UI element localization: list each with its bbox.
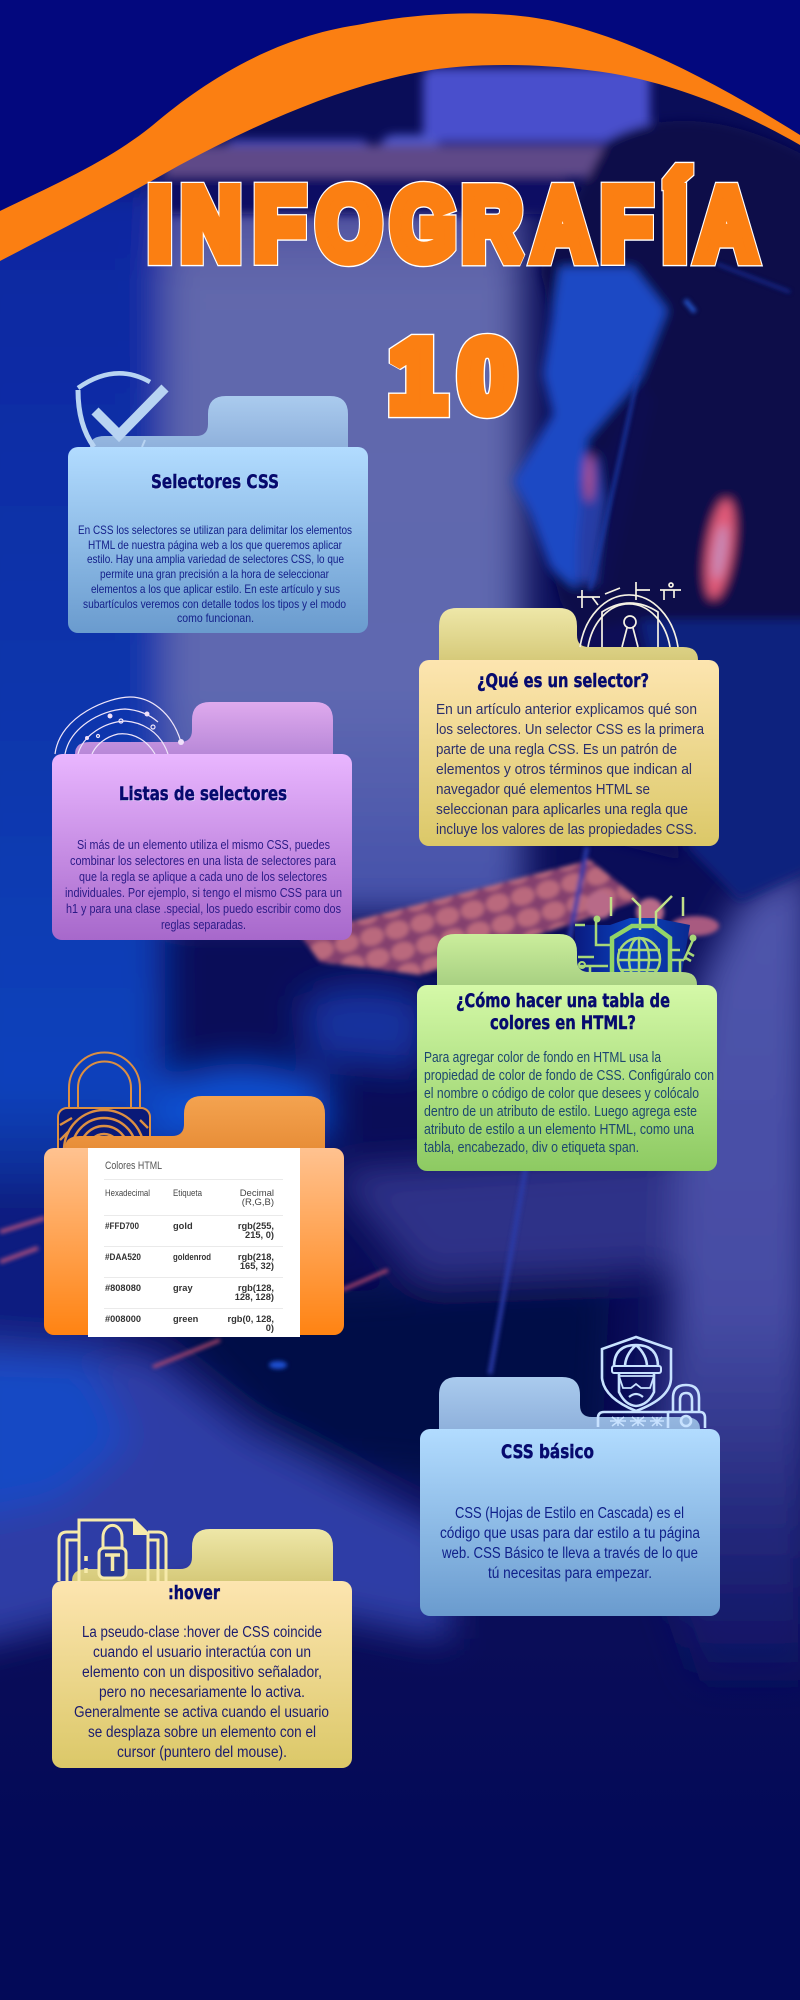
white table image: 128, 128) bbox=[235, 1292, 274, 1302]
body text bbox=[440, 1505, 700, 1582]
white table image: rgb(255, bbox=[238, 1221, 274, 1231]
white table image: Colores HTML bbox=[105, 1160, 162, 1172]
body text: combinar los selectores en una lista de selectores para bbox=[70, 853, 337, 868]
folder back bbox=[72, 1529, 333, 1581]
icon: hacker shield and lock bbox=[598, 1337, 705, 1428]
heading: Selectores CSS bbox=[152, 472, 280, 494]
white table image: #DAA520 bbox=[105, 1252, 141, 1262]
top navy sky bbox=[0, 0, 800, 211]
shelf items bbox=[423, 68, 650, 142]
panel: ¿Qué es un selector? bbox=[419, 582, 719, 846]
body text: h1 y para una clase .special, los puedo escribir como dos bbox=[66, 901, 341, 916]
body text: individuales. Por ejemplo, si tengo el mismo CSS para un bbox=[65, 885, 342, 900]
icon: globe circuit bbox=[575, 896, 696, 980]
panel: Listas de selectores bbox=[52, 697, 352, 940]
body text: incluye los valores de las propiedades CSS. bbox=[436, 821, 697, 838]
white table image bbox=[88, 1148, 300, 1337]
keyboard bbox=[300, 860, 640, 975]
white table image: Hexadecimal bbox=[105, 1188, 150, 1199]
panel: CSS básico bbox=[420, 1337, 720, 1616]
body text: HTML de nuestra página web a los que queremos aplicar bbox=[88, 538, 342, 552]
white table image: green bbox=[173, 1314, 199, 1324]
body text: atributo de estilo a un elemento HTML, como una bbox=[424, 1122, 695, 1138]
heading: CSS básico bbox=[501, 1441, 594, 1463]
title: INFOGRAFÍA 10: 10 bbox=[390, 321, 515, 433]
white table image: 215, 0) bbox=[245, 1230, 274, 1240]
body text: subartículos veremos con detalle todos los tipos y el modo bbox=[83, 597, 346, 611]
heading: :hover bbox=[168, 1582, 220, 1604]
icon: locked file bbox=[59, 1520, 166, 1581]
body text: parte de una regla CSS. Es un patrón de bbox=[436, 741, 677, 758]
body text: que la regla se aplique a cada uno de los selectores bbox=[79, 869, 327, 884]
heading: ¿Cómo hacer una tabla de bbox=[456, 990, 670, 1012]
panel: Selectores CSS bbox=[68, 373, 368, 633]
heading bbox=[456, 990, 670, 1034]
white table image: (R,G,B) bbox=[242, 1197, 274, 1208]
white table image: gray bbox=[173, 1283, 193, 1293]
head bbox=[540, 121, 800, 660]
body text: código que usas para dar estilo a tu página bbox=[440, 1525, 700, 1542]
white table image: 165, 32) bbox=[240, 1261, 274, 1271]
body text bbox=[65, 837, 342, 932]
icon: concentric arcs bbox=[55, 697, 181, 754]
body text: elemento con un dispositivo señalador, bbox=[82, 1664, 322, 1681]
body text bbox=[424, 1050, 714, 1156]
white table image: rgb(128, bbox=[238, 1283, 274, 1293]
body text: tú necesitas para empezar. bbox=[488, 1565, 652, 1582]
body text: cuando el usuario interactúa con un bbox=[93, 1644, 311, 1661]
white table image: 0) bbox=[266, 1323, 274, 1333]
title: INFOGRAFÍA 10 bbox=[149, 169, 756, 433]
white table image: #808080 bbox=[105, 1283, 141, 1293]
body text: La pseudo-clase :hover de CSS coincide bbox=[82, 1624, 322, 1641]
title: INFOGRAFÍA 10: INFOGRAFÍA bbox=[149, 169, 756, 280]
body text bbox=[78, 523, 352, 625]
body text bbox=[436, 701, 705, 838]
body text: estilo. Hay una amplia variedad de selectores CSS, lo que bbox=[87, 552, 344, 566]
icon: shield check bbox=[78, 373, 165, 447]
body text: navegador qué elementos HTML se bbox=[436, 781, 650, 798]
body text: reglas separadas. bbox=[161, 917, 246, 932]
title: INFOGRAFÍA 10: 10 bbox=[390, 321, 515, 433]
white table image: goldenrod bbox=[173, 1252, 211, 1262]
body text: los selectores. Un selector CSS es la primera bbox=[436, 721, 705, 738]
white table image: Decimal bbox=[240, 1188, 274, 1199]
body text: tabla, encabezado, div o etiqueta span. bbox=[424, 1140, 639, 1156]
white table image: #FFD700 bbox=[105, 1221, 139, 1231]
icon: fingerprint padlock bbox=[57, 1052, 151, 1148]
body text: pero no necesariamente lo activa. bbox=[99, 1684, 305, 1701]
heading: colores en HTML? bbox=[490, 1012, 636, 1034]
body text: el nombre o código de color que desees y colócalo bbox=[424, 1086, 699, 1102]
white table image: rgb(218, bbox=[238, 1252, 274, 1262]
bottom fade to navy bbox=[0, 1640, 800, 1840]
body text: Para agregar color de fondo en HTML usa la bbox=[424, 1050, 662, 1066]
keyboard glow bbox=[0, 1218, 45, 1262]
body text: CSS (Hojas de Estilo en Cascada) es el bbox=[455, 1505, 684, 1522]
white table image: Etiqueta bbox=[173, 1188, 203, 1199]
body text: En un artículo anterior explicamos qué son bbox=[436, 701, 697, 718]
body text: se desplaza sobre un elemento con el bbox=[88, 1724, 316, 1741]
body text: elementos y otros términos que indican al bbox=[436, 761, 692, 778]
body text bbox=[74, 1624, 329, 1761]
body text: seleccionan para aplicarles una regla que bbox=[436, 801, 688, 818]
white table image: rgb(0, 128, bbox=[227, 1314, 274, 1324]
body text: elementos a los que aplicar estilo. En este artículo y sus bbox=[91, 582, 340, 596]
heading: ¿Qué es un selector? bbox=[477, 670, 649, 692]
body text: web. CSS Básico te lleva a través de lo que bbox=[441, 1545, 698, 1562]
headset glow bbox=[700, 498, 740, 600]
body text: dentro de un atributo de estilo. Luego agrega este bbox=[424, 1104, 697, 1120]
heading: Listas de selectores bbox=[119, 783, 287, 805]
white table image: gold bbox=[173, 1221, 193, 1231]
body text: Si más de un elemento utiliza el mismo CSS, puedes bbox=[77, 837, 330, 852]
panel: Colores HTML table bbox=[44, 1052, 344, 1337]
panel: :hover bbox=[52, 1520, 352, 1768]
white table image: #008000 bbox=[105, 1314, 141, 1324]
body text: Generalmente se activa cuando el usuario bbox=[74, 1704, 329, 1721]
cable bbox=[490, 847, 587, 1374]
panel: ¿Cómo hacer una tabla de colores en HTML? bbox=[417, 896, 717, 1171]
body text: permite una gran precisión a la hora de seleccionar bbox=[100, 567, 329, 581]
orange wave band bbox=[0, 13, 800, 261]
body text: propiedad de color de fondo de CSS. Configúralo con bbox=[424, 1068, 714, 1084]
body text: En CSS los selectores se utilizan para delimitar los elementos bbox=[78, 523, 352, 537]
heading: Listas de selectores bbox=[120, 784, 288, 806]
body text: cursor (puntero del mouse). bbox=[117, 1744, 287, 1761]
heading: Selectores CSS bbox=[151, 471, 279, 493]
icon: keyhole circuit bbox=[577, 582, 681, 647]
title: INFOGRAFÍA 10: INFOGRAFÍA bbox=[149, 169, 756, 280]
body text: como funcionan. bbox=[177, 611, 254, 625]
